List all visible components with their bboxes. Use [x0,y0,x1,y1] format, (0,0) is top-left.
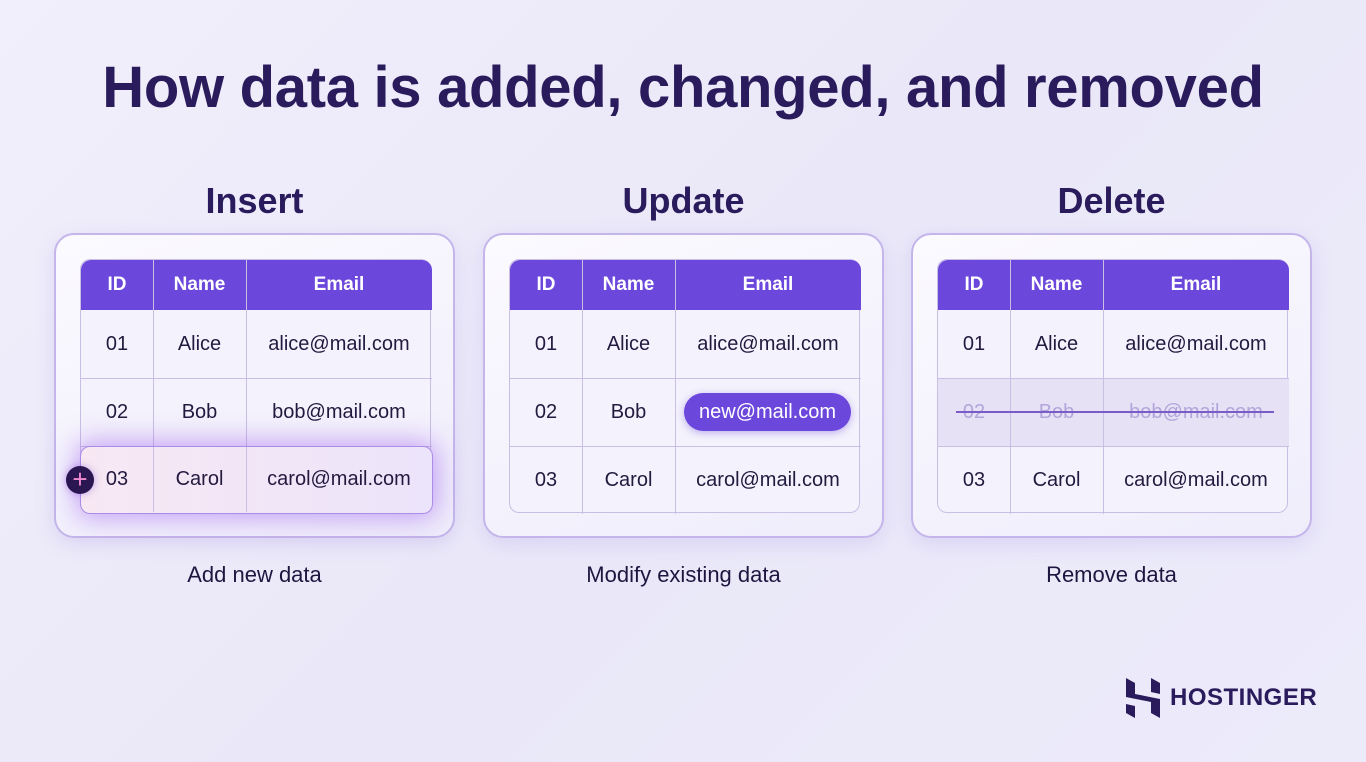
table: insert: 02 [106,400,128,422]
panel: insert [54,233,455,538]
heading: delete: Delete [1057,180,1166,221]
deleted row: 02 [963,400,985,422]
table: delete: Carol [1033,468,1080,490]
table: update: Carol [605,468,652,490]
table: update: Bob [611,400,646,422]
table: delete: 01 [963,332,985,354]
table: insert [80,259,431,513]
table: delete: Name [1031,274,1082,295]
heading: insert: Insert [205,180,304,221]
panel: delete [911,233,1312,538]
highlighted new row [80,446,433,514]
caption: delete: Remove data [1046,562,1177,587]
table: delete: Alice [1035,332,1078,354]
table: update: Alice [607,332,650,354]
logo: hostinger: HOSTINGER [1170,684,1317,711]
table: update: alice@mail.com [697,332,839,354]
deleted row: bob@mail.com [1129,400,1263,422]
deleted row [956,400,1274,422]
updated email pill: new@mail.com [699,400,836,422]
table: delete [937,259,1288,513]
table: insert: Alice [178,332,221,354]
icon: H logo [1126,678,1160,718]
icon: plus: + [72,464,88,494]
table: delete: alice@mail.com [1125,332,1267,354]
table: update: 03 [535,468,557,490]
highlighted new row: 03 [106,468,128,490]
table: insert: Name [174,274,225,295]
table: delete: Email [1171,274,1221,295]
title: How data is added, changed, and removed [102,55,1264,120]
table: insert: 01 [106,332,128,354]
table: insert: alice@mail.com [268,332,410,354]
table: update: carol@mail.com [696,468,840,490]
table: delete: carol@mail.com [1124,468,1268,490]
table: delete: 03 [963,468,985,490]
heading: update: Update [622,180,744,221]
logo: hostinger [1126,678,1317,718]
table: update [509,259,860,513]
table: update: Email [743,274,793,295]
table: update: ID [536,274,556,295]
table: insert: Bob [182,400,217,422]
updated email pill [684,393,851,431]
table: update: Name [603,274,654,295]
table: delete: ID [964,274,984,295]
table: insert: ID [108,274,126,295]
table: insert: bob@mail.com [272,400,406,422]
highlighted new row: carol@mail.com [267,468,411,490]
table: update: 02 [535,400,557,422]
table: update: 01 [535,332,557,354]
panel: update [483,233,884,538]
table: insert: Email [314,274,364,295]
deleted row: Bob [1039,400,1074,422]
caption: update: Modify existing data [586,562,781,587]
caption: insert: Add new data [187,562,322,587]
icon: plus [66,466,94,494]
highlighted new row: Carol [176,468,223,490]
